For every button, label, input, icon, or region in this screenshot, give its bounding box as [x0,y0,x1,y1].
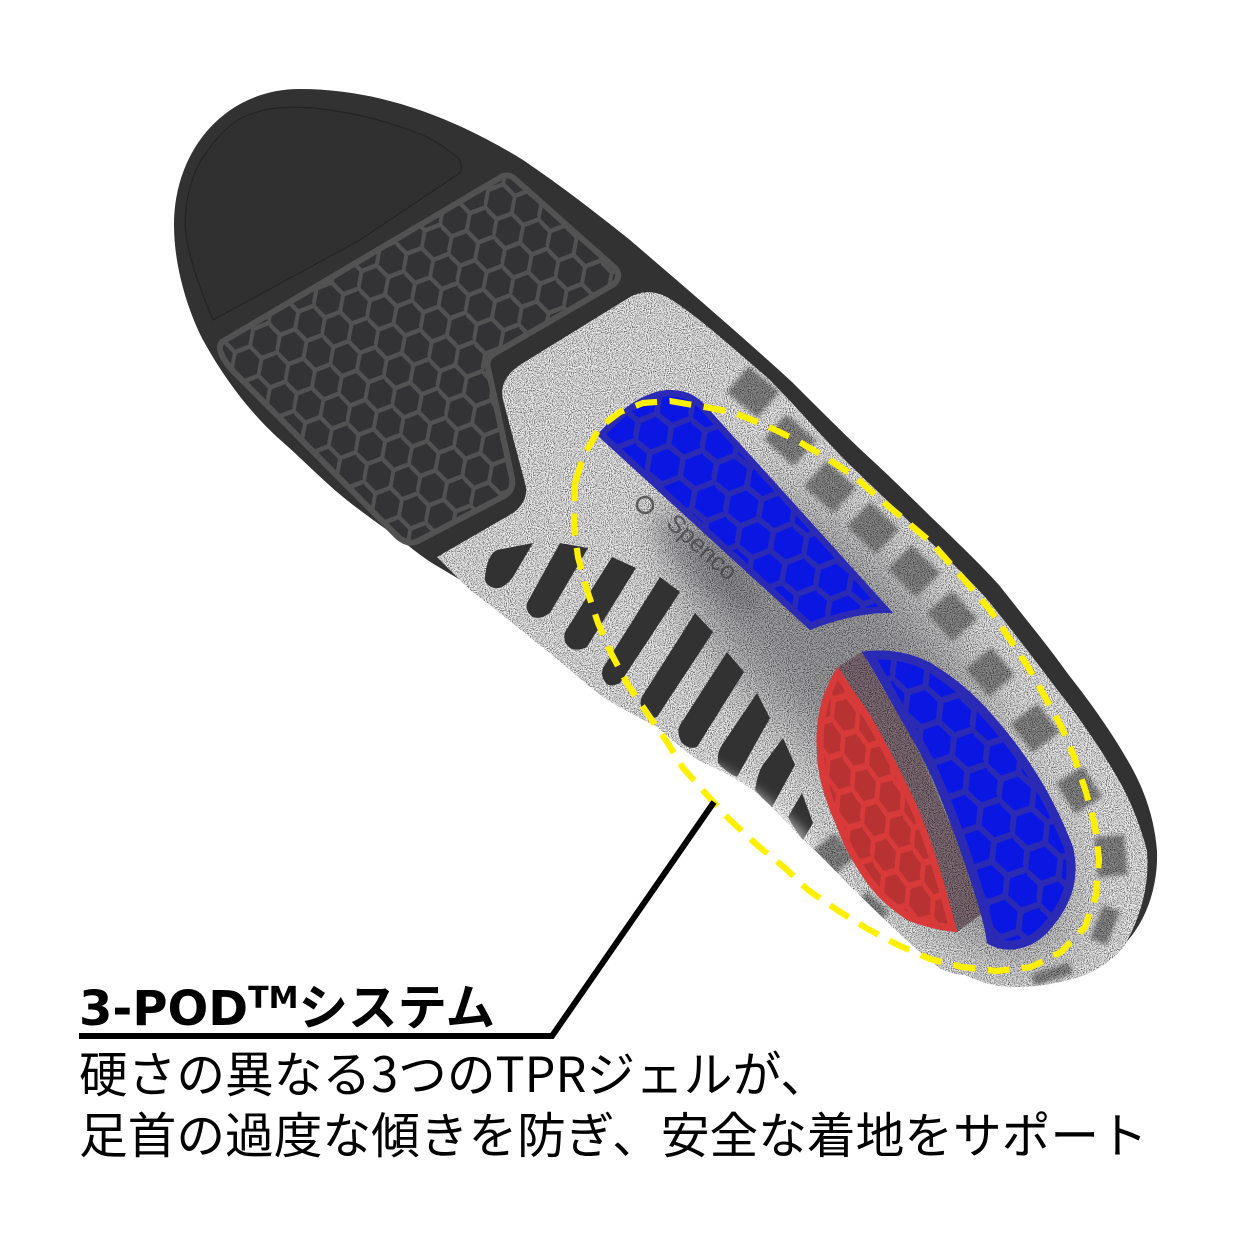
silver base layer [420,280,1170,1000]
embossed Spenco logo: Spenco [661,509,743,586]
perforated squares [727,366,1128,986]
yellow dashed highlight around 3-POD area [574,401,1099,971]
callout description [79,1037,1148,1168]
arch edge highlight fade [703,768,808,848]
callout description: 硬さの異なる3つのTPRジェルが、 [79,1037,829,1107]
callout leader line [79,802,714,1036]
callout description: 足首の過度な傾きを防ぎ、安全な着地をサポート [79,1098,1148,1168]
insole illustration [174,89,1170,1000]
pod: forefoot blue [590,385,900,635]
outer dark sole [174,89,1157,960]
pod: heel blue [862,650,1076,950]
band between heel pods [838,652,983,932]
arch stripes [485,543,813,840]
pod: heel red [816,667,957,932]
callout heading: TM [248,981,298,1016]
embossed Spenco logo [637,497,743,586]
callout heading: 3-POD [79,981,248,1037]
toe cover boundary [185,107,462,320]
silver texture [420,280,1170,1000]
honeycomb forefoot panel [220,176,618,543]
callout heading: システム [298,969,495,1040]
